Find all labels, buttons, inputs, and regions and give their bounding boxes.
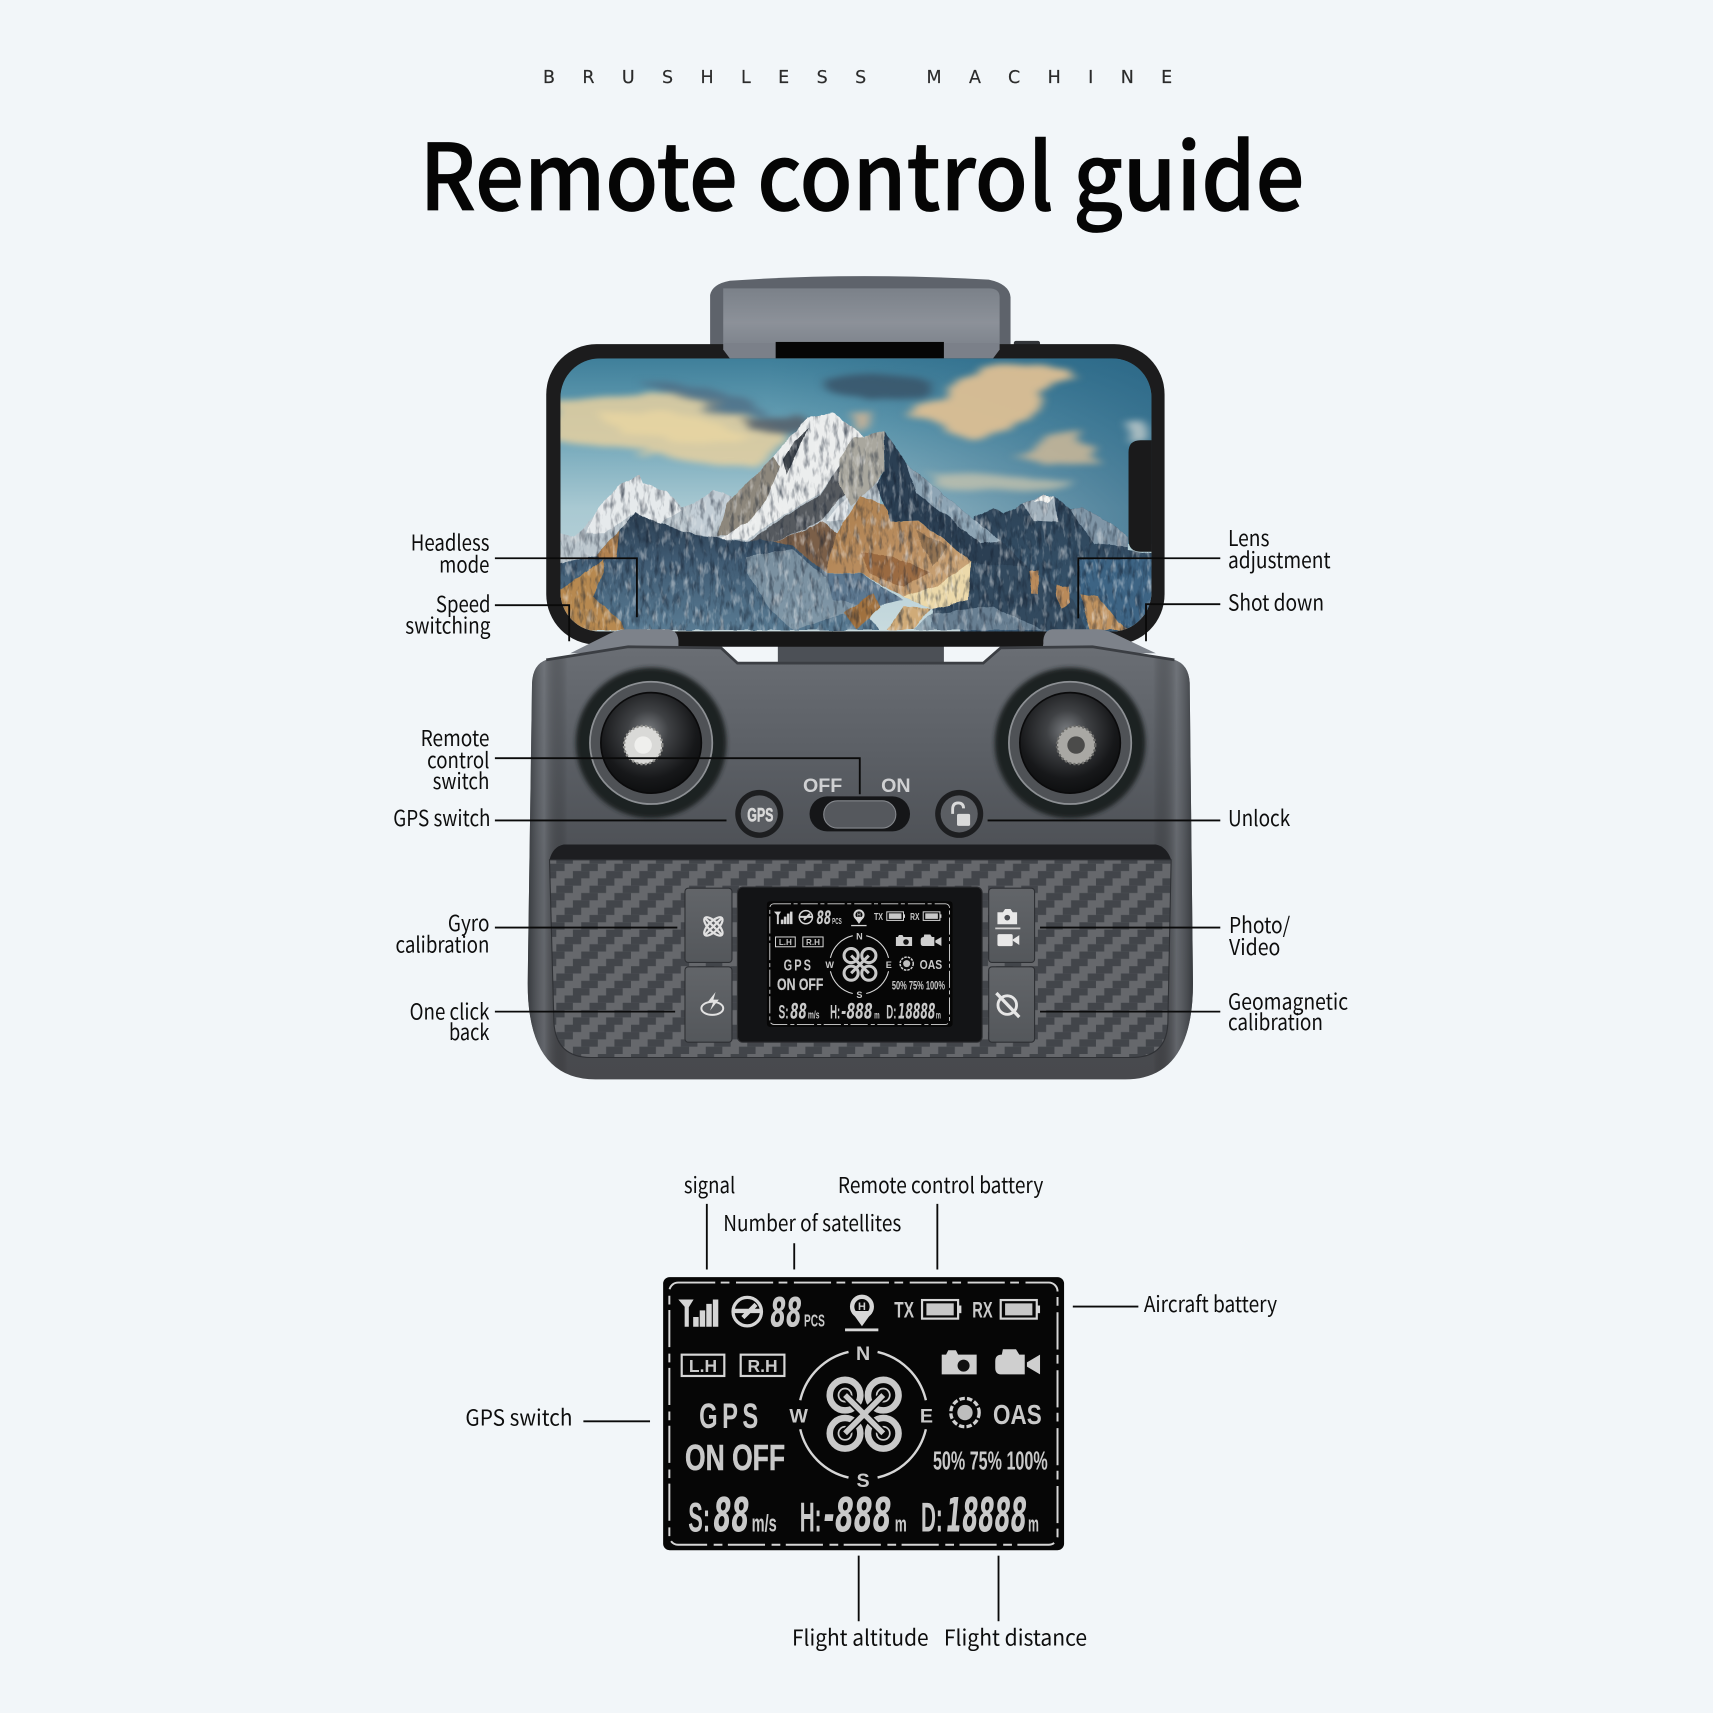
lcd: altitude readout: m xyxy=(895,1512,907,1537)
lcd: compass: E xyxy=(920,1405,933,1427)
left grip clip xyxy=(570,629,678,653)
small LCD readout: N xyxy=(856,932,863,941)
small LCD readout: L.H xyxy=(779,938,792,947)
label: Geomagnetic calibration: Geomagnetic xyxy=(1228,985,1348,1016)
label: Photo/Video: Video xyxy=(1229,931,1280,962)
lcd: video icon xyxy=(995,1349,1040,1374)
right range and shadow face xyxy=(840,431,1152,633)
phone screen: mountain photo xyxy=(552,358,1152,633)
left joystick xyxy=(576,668,726,818)
label: Number of satellites: Number of satellites xyxy=(723,1207,901,1238)
small LCD readout: ON OFF xyxy=(777,975,823,994)
lcd: altitude readout: -888 xyxy=(824,1489,891,1544)
label: GPS switch LCD: GPS switch xyxy=(465,1402,572,1433)
controller xyxy=(528,629,1193,1079)
phone mount clamp xyxy=(710,276,1011,361)
right grip clip xyxy=(1043,629,1156,653)
LCD bezel xyxy=(737,887,982,1042)
far peaks and main snow mountain xyxy=(560,413,880,573)
lcd: PCS unit: PCS xyxy=(804,1310,825,1330)
lcd: distance readout xyxy=(921,1489,1039,1544)
label: Lens adjustment: adjustment xyxy=(1228,544,1331,575)
small LCD readout: S xyxy=(856,990,863,1000)
OFF label: OFF xyxy=(803,775,842,797)
label: One click back: One click xyxy=(410,995,489,1026)
small LCD readout: 88 xyxy=(816,908,831,929)
lcd: distance readout: m xyxy=(1028,1512,1039,1537)
lcd: speed percentages: 50% 75% 100% xyxy=(933,1445,1048,1475)
label: Gyro calibration: calibration xyxy=(395,929,489,960)
golden rock and foreground right xyxy=(825,497,1128,630)
small LCD readout: 50% 75% 100% xyxy=(892,979,945,993)
phone top button xyxy=(1014,341,1040,347)
power switch xyxy=(803,775,911,831)
geomagnetic button xyxy=(989,967,1035,1042)
phone notch xyxy=(1129,440,1151,552)
label: Remote control battery: Remote control battery xyxy=(838,1169,1044,1200)
lcd: drone icon xyxy=(830,1380,899,1449)
small LCD readout: D: xyxy=(886,1002,896,1023)
lcd: altitude readout xyxy=(800,1489,907,1544)
small LCD readout: R.H xyxy=(806,938,820,947)
photo video button xyxy=(989,888,1035,962)
label: Speed switching: Speed xyxy=(436,588,491,619)
lcd: compass: W xyxy=(789,1405,808,1427)
lcd: right hand mode: R.H xyxy=(748,1356,778,1376)
label: Remote control switch: Remote xyxy=(421,722,489,753)
label: Gyro calibration xyxy=(395,907,489,960)
lcd: left hand mode: L.H xyxy=(689,1356,717,1376)
lcd: altitude readout: H: xyxy=(800,1494,822,1541)
carbon fibre panel xyxy=(550,860,1171,1058)
lcd: OAS: OAS xyxy=(993,1399,1042,1430)
title: Remote control guide xyxy=(420,105,1304,237)
lcd: satellite icon xyxy=(733,1297,761,1326)
controller body xyxy=(528,647,1193,1079)
small LCD readout: E xyxy=(886,960,892,970)
lcd: signal icon xyxy=(680,1300,718,1326)
small LCD readout: 88 xyxy=(790,999,807,1024)
lcd: TX battery xyxy=(894,1298,961,1323)
label: Photo/Video xyxy=(1229,909,1291,962)
small LCD readout xyxy=(767,901,953,1027)
small LCD readout: W xyxy=(825,960,834,970)
lcd: ON OFF: ON OFF xyxy=(685,1437,785,1478)
lcd: compass: N xyxy=(856,1343,870,1365)
label: Unlock: Unlock xyxy=(1228,802,1290,833)
lcd: satellite count: 88 xyxy=(770,1288,802,1336)
dark band xyxy=(550,844,1171,860)
mount stem xyxy=(778,645,944,666)
lcd: home pin icon xyxy=(845,1297,878,1331)
label: Remote control switch: control xyxy=(427,744,489,775)
small LCD readout: H: xyxy=(830,1002,840,1023)
body top edge xyxy=(546,647,1174,663)
label: One click back xyxy=(410,995,489,1047)
label: Headless mode: mode xyxy=(439,548,489,579)
lcd: camera icon xyxy=(942,1350,977,1374)
large LCD panel xyxy=(663,1277,1064,1550)
lcd: compass xyxy=(789,1343,933,1492)
lcd: speed readout: 88 xyxy=(713,1489,749,1544)
small LCD readout: S: xyxy=(779,1002,789,1023)
label: Remote control switch: switch xyxy=(433,765,489,796)
small LCD readout: RX xyxy=(910,912,920,923)
right joystick xyxy=(995,668,1145,818)
callout lines: LCD xyxy=(583,1204,1138,1621)
small LCD readout: m xyxy=(936,1010,941,1021)
label: signal: signal xyxy=(684,1169,735,1200)
small LCD readout: PCS xyxy=(832,917,842,926)
one click back button xyxy=(685,967,732,1042)
lcd: speed readout: m/s xyxy=(752,1511,777,1538)
label: Speed switching: switching xyxy=(405,610,491,641)
small LCD readout: m xyxy=(874,1010,880,1021)
clamp notch xyxy=(776,342,944,358)
body side shading xyxy=(528,650,1193,1079)
label: Headless mode: Headless xyxy=(411,527,489,558)
lcd: speed readout: S: xyxy=(688,1494,710,1541)
phone clamp and phone xyxy=(546,276,1165,645)
phone lower bar xyxy=(677,631,1043,647)
mountains xyxy=(560,413,1152,633)
label: Photo/Video: Photo/ xyxy=(1229,909,1291,940)
lcd: distance readout: 18888 xyxy=(946,1489,1027,1544)
label: Flight distance: Flight distance xyxy=(944,1621,1087,1652)
label: Lens adjustment xyxy=(1228,522,1331,575)
small LCD readout: GPS xyxy=(784,957,813,974)
lcd: left hand mode xyxy=(682,1355,724,1376)
lcd: GPS: GPS xyxy=(699,1397,763,1436)
label: Remote control switch xyxy=(421,722,489,796)
clamp centre xyxy=(723,343,1000,358)
label: Headless mode xyxy=(411,527,489,579)
lcd: obstacle avoidance icon xyxy=(951,1398,979,1427)
unlock button xyxy=(935,790,983,838)
lcd: RX battery xyxy=(972,1298,1040,1323)
label: Aircraft battery: Aircraft battery xyxy=(1144,1288,1278,1319)
ON label: ON xyxy=(881,775,911,797)
infographic canvas xyxy=(394,70,1348,1651)
small LCD readout: TX xyxy=(874,912,883,923)
label: Speed switching xyxy=(405,588,491,641)
label: One click back: back xyxy=(449,1016,489,1047)
small LCD readout: OAS xyxy=(920,958,942,972)
lcd: compass: S xyxy=(856,1470,870,1492)
sky clouds xyxy=(552,365,1149,489)
label: Geomagnetic calibration: calibration xyxy=(1228,1006,1323,1037)
gyro button xyxy=(685,888,732,962)
small LCD readout: m/s xyxy=(808,1009,820,1021)
phone body xyxy=(546,344,1165,645)
callout lines: controller xyxy=(495,558,1220,1012)
foreground dark ridge xyxy=(560,513,880,630)
lcd: RX battery: RX xyxy=(972,1298,993,1323)
label: GPS switch: GPS switch xyxy=(393,802,491,833)
GPS button: GPS xyxy=(747,805,773,827)
label: Gyro calibration: Gyro xyxy=(448,907,489,938)
small LCD readout: H xyxy=(857,912,861,918)
small LCD readout: 18888 xyxy=(898,999,935,1024)
lcd: right hand mode xyxy=(741,1355,784,1376)
GPS button xyxy=(735,790,783,838)
label: Lens adjustment: Lens xyxy=(1228,522,1269,553)
lcd: home pin icon: H xyxy=(858,1301,866,1313)
label: Shot down: Shot down xyxy=(1228,587,1324,618)
lcd: TX battery: TX xyxy=(894,1298,914,1323)
label: Geomagnetic calibration xyxy=(1228,985,1348,1037)
eyebrow heading: BRUSHLESS MACHINE xyxy=(543,68,1172,88)
small LCD readout: -888 xyxy=(841,999,873,1024)
label: Flight altitude: Flight altitude xyxy=(792,1621,929,1652)
lcd: distance readout: D: xyxy=(921,1494,943,1541)
